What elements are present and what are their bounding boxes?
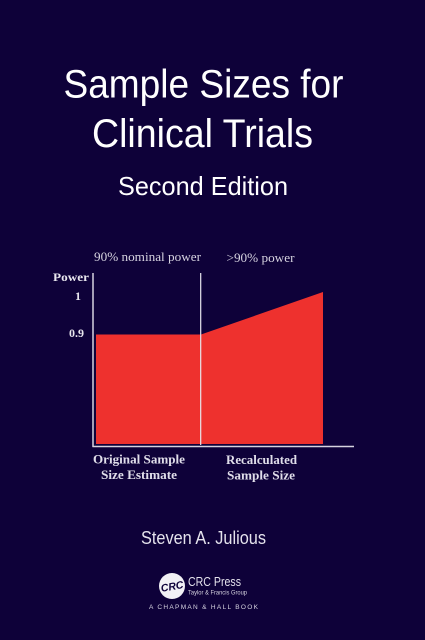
subtitle: Second Edition	[118, 171, 288, 201]
label: 90% nominal power: 90% nominal power	[94, 249, 202, 264]
x label: recalculated sample size: Sample Size	[227, 468, 295, 482]
red power area	[96, 292, 323, 444]
divider line	[200, 273, 202, 445]
x label: recalculated sample size	[226, 453, 297, 482]
publisher group: Taylor & Francis Group	[188, 590, 247, 596]
publisher name: CRC Press	[188, 574, 241, 589]
title: Clinical Trials	[92, 112, 313, 156]
title	[64, 62, 344, 156]
label: greater than 90% power: >90% power	[226, 250, 295, 265]
y axis labels: Power	[53, 270, 90, 284]
imprint line: A CHAPMAN & HALL BOOK	[149, 604, 259, 611]
x label: original sample size estimate: Original Sample	[93, 452, 185, 466]
y axis labels: 0.9	[69, 326, 84, 340]
x axis	[92, 446, 354, 448]
chart: power by sample size	[53, 249, 354, 482]
icon: CRC circle: CRC	[160, 579, 185, 595]
y axis labels	[53, 270, 90, 340]
y axis labels: 1	[75, 289, 81, 303]
x label: original sample size estimate	[93, 452, 185, 482]
author: Steven A. Julious	[141, 528, 266, 548]
x label: recalculated sample size: Recalculated	[226, 453, 297, 467]
x label: original sample size estimate: Size Estimate	[101, 468, 177, 482]
y axis	[92, 273, 94, 447]
publisher logo	[149, 573, 259, 611]
title: Sample Sizes for	[64, 62, 344, 106]
